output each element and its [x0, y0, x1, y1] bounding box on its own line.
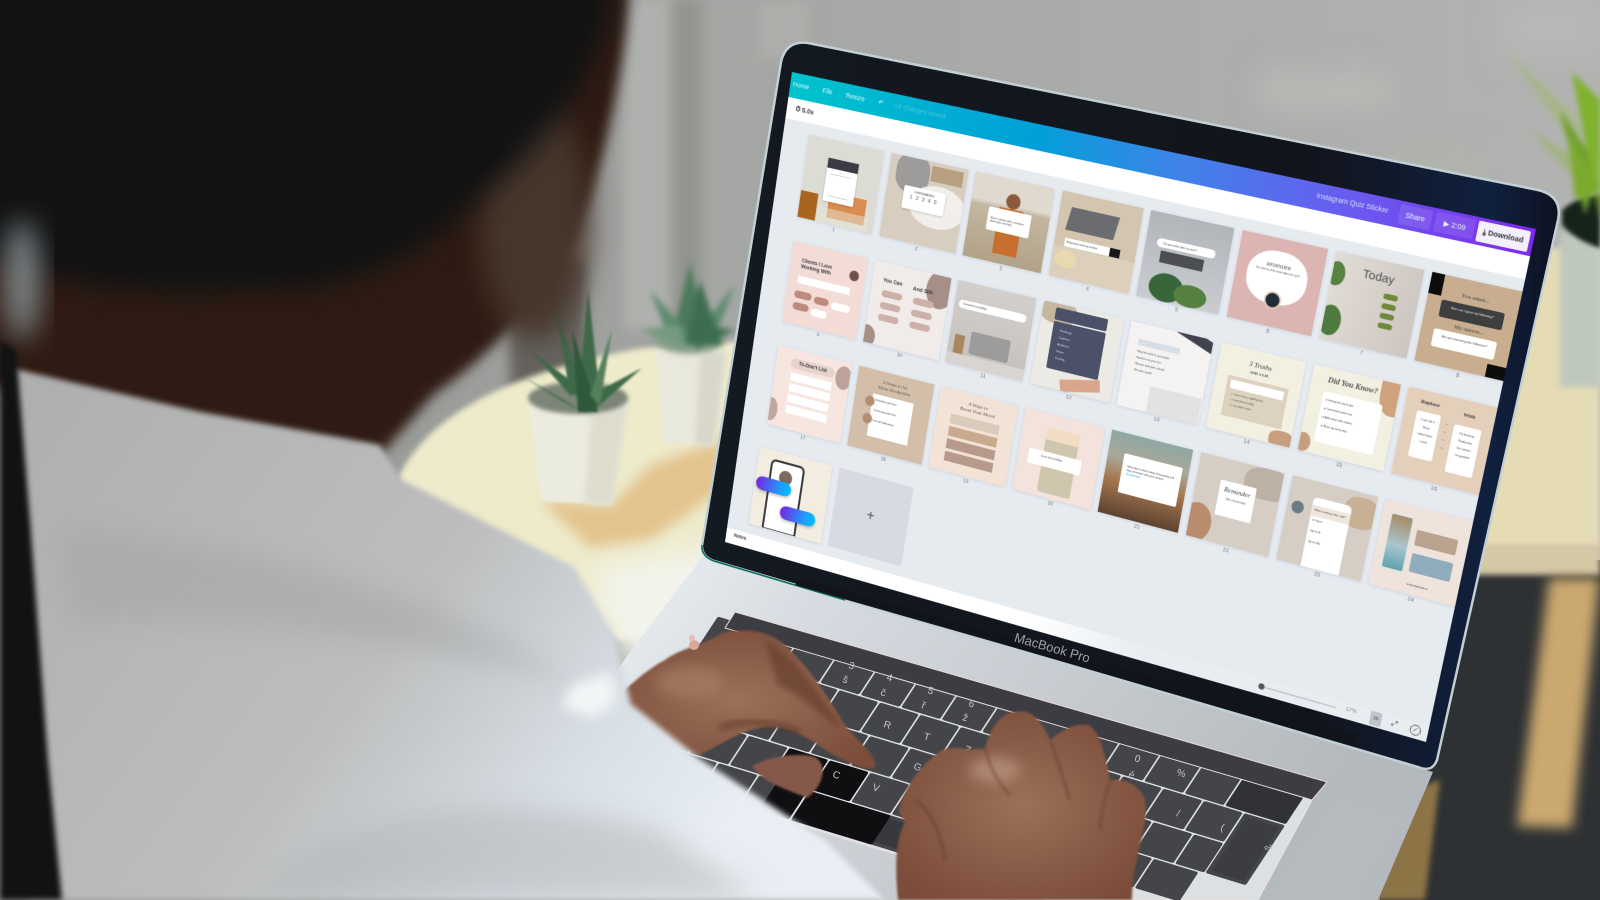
thumbnail 24: 24 — [1407, 596, 1414, 603]
thumbnail 21: Great tips to share today. Keep going and stay consistent with your content. — [1126, 465, 1174, 481]
play button: ▶ 2:09 — [1443, 219, 1466, 232]
timer: ⏱ 5.0s — [795, 105, 814, 116]
thumbnail 12: Posting — [1055, 356, 1065, 362]
thumbnail 14: ○ I have been to Bali — [1230, 398, 1254, 407]
thumbnail 18: Do the big tasks first — [874, 409, 896, 417]
thumbnail 16: → — [1438, 445, 1444, 451]
thumbnail 13: Send out to your list — [1136, 356, 1161, 365]
key labels: 3 — [847, 660, 856, 673]
key labels: ⏎ — [1262, 842, 1273, 855]
thumbnail 8: 8 — [1455, 373, 1460, 379]
thumbnail 18: 18 — [880, 456, 886, 463]
thumbnail 17 — [767, 345, 852, 444]
thumbnail 18: 2 Steps to be — [883, 379, 908, 391]
laptop deck — [575, 556, 1433, 900]
key labels: 4 — [885, 672, 894, 685]
thumbnail 16: I'm curious — [1456, 446, 1471, 453]
plant in white pot, front — [520, 290, 642, 505]
key labels: ž — [961, 712, 969, 724]
thumbnail 17: 17 — [800, 435, 806, 441]
key labels: 5 — [926, 685, 935, 698]
thumbnail 14: 14 — [1243, 439, 1250, 446]
thumbnail 15: ● Show up every day — [1320, 424, 1347, 433]
thumbnail 8: How can I grow my following? — [1450, 306, 1494, 319]
thumbnail 22 — [1186, 452, 1284, 558]
left hand — [600, 631, 875, 769]
thumbnail 23: ● Log in — [1312, 518, 1323, 524]
thumbnail 17: To-Don't List — [798, 362, 827, 374]
thumbnail 16: With — [1463, 411, 1476, 421]
thumbnail 13: 13 — [1153, 416, 1160, 423]
thumbnail 19: 4 Ways to — [968, 401, 988, 412]
thumbnail 16: I'm learning — [1459, 432, 1474, 439]
thumbnail 16: Busy — [1423, 426, 1430, 430]
thumbnail 25 — [748, 446, 832, 544]
key labels: 0 — [1133, 753, 1142, 766]
thumbnail 16: Productive — [1458, 439, 1472, 446]
key labels: Z — [963, 744, 972, 757]
thumbnail 14: 3 Truths — [1249, 360, 1273, 373]
reflective dark keys — [753, 750, 908, 843]
thumbnail 16: I'm grateful — [1455, 453, 1469, 460]
dark hair strand at left — [0, 340, 62, 900]
thumbnail 6: REMINDER — [1266, 262, 1291, 272]
thumbnail 3: 3 — [999, 266, 1002, 272]
thumbnail 12 — [1030, 300, 1124, 404]
footer bar — [725, 527, 1429, 742]
play button — [1433, 212, 1476, 240]
thumbnail 7: 7 — [1359, 350, 1363, 356]
menu: Home File Resize ↶ All changes saved — [793, 80, 946, 120]
key labels: é — [1127, 769, 1136, 782]
thumbnail 22: 22 — [1222, 547, 1229, 554]
thumbnail 19: Boost Your Mood — [960, 405, 995, 420]
thumbnail 14: AND A LIE — [1249, 371, 1269, 379]
download button: ⤓ Download — [1482, 227, 1524, 244]
thumbnail 5 — [1136, 210, 1234, 316]
thumbnail 21: #learnthings — [1125, 472, 1140, 479]
blurred wall objects — [1260, 0, 1600, 195]
thumbnail 23: Up to 5k — [1310, 529, 1321, 535]
page count icon: 25 — [1373, 716, 1379, 722]
key labels: V — [871, 782, 881, 795]
zoom percent: 17% — [1345, 707, 1357, 715]
thumbnail 9 — [782, 241, 868, 340]
page count icon — [1369, 711, 1383, 727]
thumbnail 10: And Still — [913, 286, 933, 296]
thumbnail 16 — [1390, 386, 1498, 496]
thumbnail 15: ● Instagram reach tips — [1325, 398, 1354, 408]
right plant — [1507, 52, 1600, 387]
thumbnail 20: 20 — [1047, 501, 1053, 507]
thumbnail 24: www.mybrand.co — [1406, 582, 1428, 591]
dark hair — [0, 0, 615, 292]
thumbnail 16: I wish — [1419, 440, 1427, 445]
thumbnail 13: Set your goals — [1134, 368, 1152, 375]
thumbnail 9: Clients I Love Working With — [801, 258, 833, 276]
thumbnail 5: 5 — [1174, 307, 1178, 313]
thumbnail 18: Turn off notifications — [872, 419, 894, 427]
thumbnail 20 — [1012, 408, 1105, 510]
key labels: č — [879, 687, 887, 699]
thumbnail 6: 6 — [1266, 328, 1270, 335]
thumbnail 1 — [797, 134, 926, 235]
thumbnail 3 — [962, 171, 1055, 274]
thumbnail 2: 1 2 3 4 5 — [909, 193, 938, 206]
thumbnail 23: Who's coming to the sale? — [1314, 508, 1346, 519]
thumbnail 13: Stay focused on your plan — [1137, 349, 1170, 360]
white shirt — [11, 368, 884, 900]
thumbnail 10: 10 — [896, 352, 903, 359]
thumbnail 7: Today — [1362, 267, 1396, 288]
thumbnail 2: OVERSHARING — [914, 190, 935, 198]
thumbnail 14: ○ I can make sushi — [1229, 403, 1251, 411]
thumbnail 13 — [1116, 321, 1214, 426]
check icon — [1409, 723, 1422, 737]
thumbnail 9: 9 — [816, 332, 820, 338]
thumbnail 13: Review and plan ahead — [1135, 362, 1164, 372]
thumbnail 2 — [879, 152, 969, 254]
thumbnail 12: Share — [1056, 349, 1064, 355]
thumbnail 8: My answer... — [1454, 323, 1484, 336]
key labels: š — [841, 674, 849, 686]
thumbnail 8: Are you nurturing the followers? — [1441, 334, 1488, 348]
thumbnail 3: Share a photo with a sentence about your morning — [990, 216, 1024, 227]
thumbnail 12: Captions — [1058, 335, 1070, 342]
thumbnail 11: Document everything — [963, 302, 987, 311]
thumbnail 15: ● Add value with stories — [1322, 415, 1352, 426]
plant in white pot, back — [640, 262, 735, 446]
check icon: ✓ — [1412, 726, 1419, 734]
thumbnail 16: → — [1440, 437, 1446, 443]
thumbnail 15: ● Consistent posts win — [1324, 407, 1352, 417]
thumbnail 16: 16 — [1430, 486, 1438, 493]
fullscreen icon: ⤢ — [1391, 719, 1399, 729]
thumbnail 16: Replace — [1420, 398, 1441, 409]
thumbnail 14 — [1206, 342, 1306, 448]
speaker grille — [1258, 795, 1405, 900]
thumbnail 6: You don't need the most impressive post. — [1256, 265, 1300, 278]
thumbnail 8 — [1414, 272, 1523, 382]
thumbnail 8: You asked... — [1461, 292, 1490, 305]
left round table — [398, 340, 760, 665]
key labels: ( — [1219, 822, 1226, 834]
thumbnail 11: 11 — [980, 373, 986, 380]
thumbnail 16: → — [1443, 422, 1449, 428]
key labels: ř — [920, 700, 927, 712]
keyboard keys — [622, 619, 1302, 900]
MacBook Pro logo: MacBook Pro — [1013, 630, 1092, 666]
thumbnail 16: I can't do it — [1421, 418, 1435, 424]
thumbnail 12: Audience — [1057, 342, 1070, 349]
toolbar — [785, 97, 1530, 279]
key labels — [831, 660, 1273, 855]
thumbnail 18: More Productive — [878, 384, 911, 398]
thumbnail 1: 1 — [832, 227, 835, 233]
key labels: 6 — [967, 698, 976, 711]
white earpiece blur — [4, 220, 40, 340]
screen bezel — [702, 43, 1559, 769]
share button — [1397, 204, 1433, 230]
thumbnail 23: 23 — [1313, 572, 1320, 578]
key labels: C — [831, 769, 841, 782]
thumbnail 19: 19 — [963, 478, 969, 485]
thumbnail 23: Up to 10k — [1308, 540, 1320, 546]
thumbnail 10: You Can — [883, 278, 903, 287]
thumbnail 12: 12 — [1065, 394, 1072, 401]
key labels: R — [882, 719, 892, 732]
thumbnail 22: Reminder — [1224, 485, 1251, 499]
thumbnail 4: Enjoy your morning routine — [1066, 240, 1097, 250]
thumbnail 24 — [1368, 498, 1474, 608]
thumbnail 6 — [1226, 230, 1328, 338]
header bar — [788, 72, 1536, 256]
bezel chin green edge — [702, 545, 845, 600]
add page tile: + — [865, 507, 876, 525]
key labels: % — [1175, 767, 1187, 781]
thumbnail 7 — [1319, 250, 1424, 360]
thumbnail 16: → — [1442, 430, 1447, 435]
thumbnail 16: I don't know — [1417, 432, 1433, 439]
thumbnail 12: Hashtags — [1059, 328, 1072, 335]
zoom slider — [1261, 686, 1336, 708]
notes label: Notes — [733, 533, 747, 541]
thumbnail 11 — [945, 280, 1036, 382]
thumbnail 5: Do you take time to rest? — [1163, 241, 1197, 253]
left hand thumb — [752, 755, 823, 798]
download button — [1475, 221, 1531, 252]
thumbnail 19 — [928, 386, 1018, 488]
curtain folds — [510, 0, 810, 410]
right hand — [896, 711, 1146, 900]
panel: design editor screen — [725, 72, 1536, 742]
thumbnail 18: Schedule tasks first — [875, 398, 897, 407]
thumbnail 21: 21 — [1134, 524, 1140, 530]
person head — [0, 0, 628, 452]
thumbnail 15: 15 — [1335, 462, 1342, 469]
key labels: / — [1175, 808, 1181, 820]
thumbnail 15: Did You Know? — [1327, 376, 1379, 396]
ring — [689, 635, 699, 650]
thumbnail 22: Take a break today — [1225, 497, 1246, 506]
keyboard well — [618, 628, 1312, 900]
hinge notch — [795, 578, 1360, 745]
thumbnail 20: Scan here to follow — [1041, 454, 1062, 463]
share button: Share — [1405, 211, 1426, 223]
thumbnail 15 — [1298, 364, 1402, 472]
thumbnail 2: 2 — [914, 246, 918, 252]
right table, floor and leg — [1370, 248, 1600, 900]
thumbnail 23 — [1276, 475, 1378, 582]
key labels: G — [912, 761, 923, 774]
thumbnail 4: 4 — [1086, 286, 1089, 292]
thumbnail 18 — [847, 366, 934, 466]
thumbnail 4 — [1048, 190, 1144, 295]
key labels: T — [922, 731, 931, 744]
document title: Instagram Quiz Sticker — [1316, 191, 1389, 215]
touch bar — [725, 612, 1327, 800]
thumbnail 14: ○ I once won a spelling bee — [1231, 392, 1263, 403]
thumbnail 21 — [1097, 429, 1194, 534]
thumbnail 10 — [862, 260, 952, 361]
